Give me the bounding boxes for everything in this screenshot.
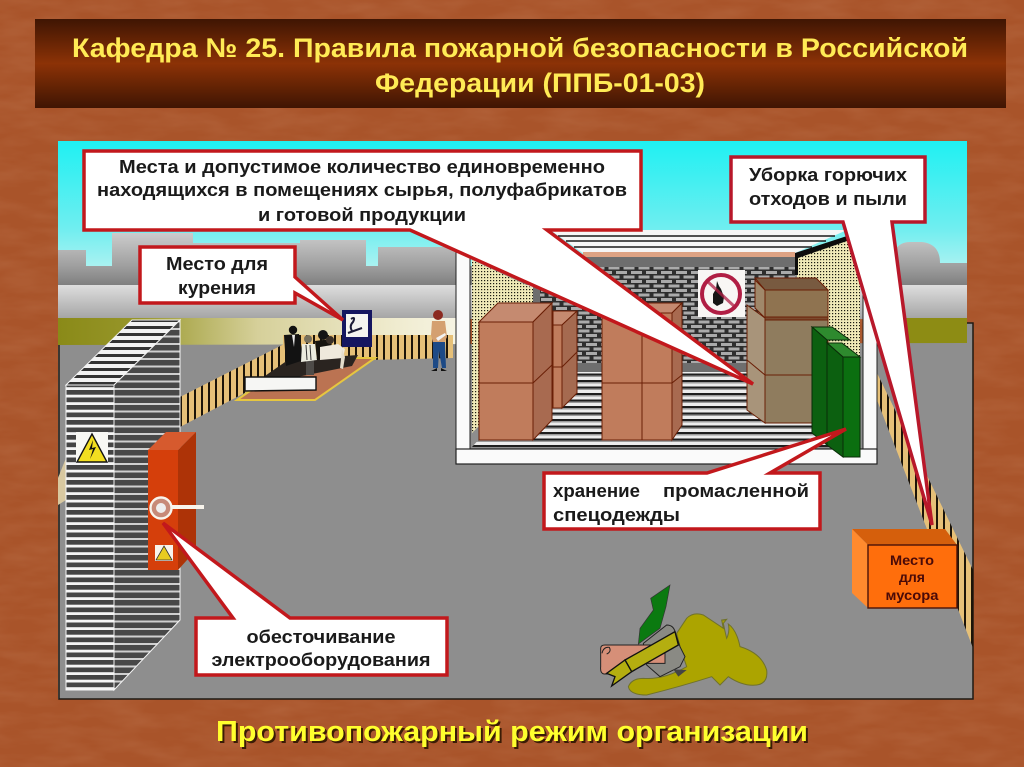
callout: storage quantities (84, 151, 753, 384)
title banner (35, 19, 1006, 108)
bench (245, 377, 316, 391)
bottom heading: Противопожарный режим организации (216, 716, 808, 748)
title banner: Федерации (ППБ-01-03) (375, 68, 705, 98)
callout: waste cleaning: отходов и пыли (749, 188, 907, 209)
back wall with bricks (533, 257, 795, 372)
smoker two (301, 335, 317, 362)
trash box (852, 529, 957, 608)
callout: de-energising equipment: электрооборудования (212, 649, 430, 670)
right diagonal fence (877, 373, 973, 648)
electrical cabinet grille (66, 320, 180, 690)
grey ground (58, 323, 973, 699)
sign: smoking place (342, 310, 372, 347)
seated bench base (262, 355, 358, 378)
smoker one (284, 326, 304, 366)
pale horizon band (58, 285, 967, 319)
callout: de-energising equipment (163, 523, 447, 675)
icon: high voltage warning (76, 432, 108, 463)
callout: storage quantities: Места и допустимое количество единовременно (119, 157, 605, 177)
icon: no open fire sign (698, 270, 745, 317)
callout: oily workwear storage: промасленной (663, 480, 809, 501)
green lockers (812, 327, 860, 457)
callout: oily workwear storage (544, 429, 846, 529)
left diagonal fence (180, 340, 292, 427)
callout: smoking place: Место для (166, 253, 268, 274)
right olive wall (870, 318, 967, 344)
small left fence piece (58, 458, 66, 505)
callout: smoking place (140, 247, 343, 320)
smoker four (320, 336, 345, 369)
box stack right (747, 278, 828, 423)
red switch box (148, 432, 196, 570)
panel: workplace scene (58, 141, 973, 699)
oily rags pile (601, 585, 767, 695)
group of smokers (262, 326, 358, 378)
boxes stacks (479, 278, 828, 440)
callout: oily workwear storage: хранение (553, 480, 640, 501)
callout: oily workwear storage: спецодежды (553, 504, 680, 525)
icon: small warning (155, 545, 173, 561)
callout: storage quantities: находящихся в помещениях сырья, полуфабрикатов (97, 180, 627, 200)
smoking area pad (237, 358, 375, 400)
title banner: Кафедра № 25. Правила пожарной безопасности в Российской (72, 33, 968, 63)
trash box: Место (890, 552, 934, 568)
back wall (58, 318, 458, 346)
callout: de-energising equipment: обесточивание (246, 626, 396, 647)
roof strips (550, 230, 847, 253)
box stack rear (553, 311, 577, 408)
sky (58, 141, 967, 286)
back fence (283, 335, 453, 362)
floor slab (456, 449, 877, 464)
callout: waste cleaning: Уборка горючих (749, 164, 908, 185)
switch handle (150, 498, 204, 518)
callout: smoking place: курения (178, 277, 256, 298)
callout: waste cleaning (731, 157, 932, 525)
striped floor (472, 372, 850, 447)
city skyline (58, 233, 967, 290)
man standing (431, 310, 447, 371)
smoker three (315, 330, 333, 360)
pillars (456, 250, 470, 449)
storage building (456, 230, 877, 464)
box stack left (479, 303, 552, 440)
box stack centre (602, 303, 682, 440)
trash box: мусора (886, 587, 939, 603)
right dotted wall (797, 240, 860, 360)
left dotted wall (472, 260, 533, 433)
bottom heading: Противопожарный режим организации (218, 718, 810, 750)
callout: storage quantities: и готовой продукции (258, 205, 466, 225)
trash box: для (899, 569, 925, 585)
